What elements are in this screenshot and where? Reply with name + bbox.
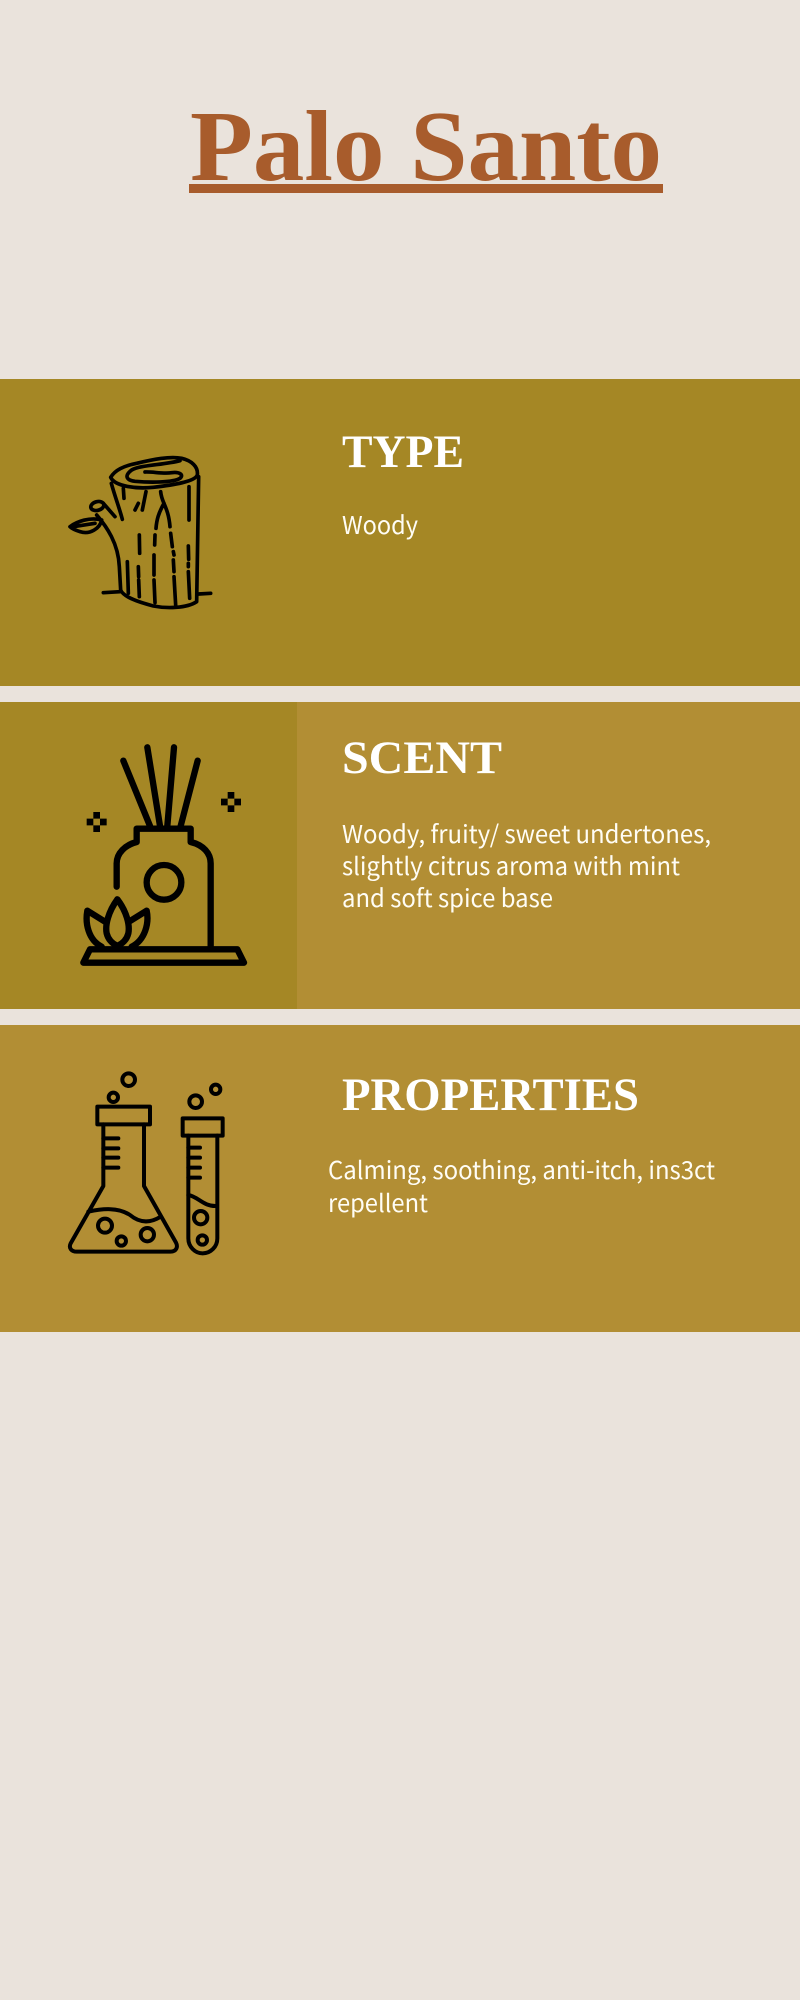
heading: scent: SCENT — [342, 732, 502, 784]
panel: scent — [0, 702, 800, 1009]
title: Palo Santo — [190, 90, 662, 202]
heading: type: TYPE — [342, 426, 464, 478]
icon: flask and test tube — [70, 1073, 223, 1253]
text: scent: and soft spice base — [342, 880, 553, 915]
text: scent: slightly citrus aroma with mint — [342, 848, 680, 883]
panel: properties — [0, 1025, 800, 1332]
icon: reed diffuser — [83, 747, 244, 963]
text: type: Woody — [342, 507, 418, 542]
text: properties: Calming, soothing, anti-itch, ins3ct — [328, 1152, 715, 1187]
panel: type — [0, 379, 800, 686]
icon: tree stump — [70, 458, 211, 608]
text: scent: Woody, fruity/ sweet undertones, — [342, 816, 711, 851]
heading: properties: PROPERTIES — [342, 1069, 639, 1121]
text: properties: repellent — [328, 1185, 428, 1220]
